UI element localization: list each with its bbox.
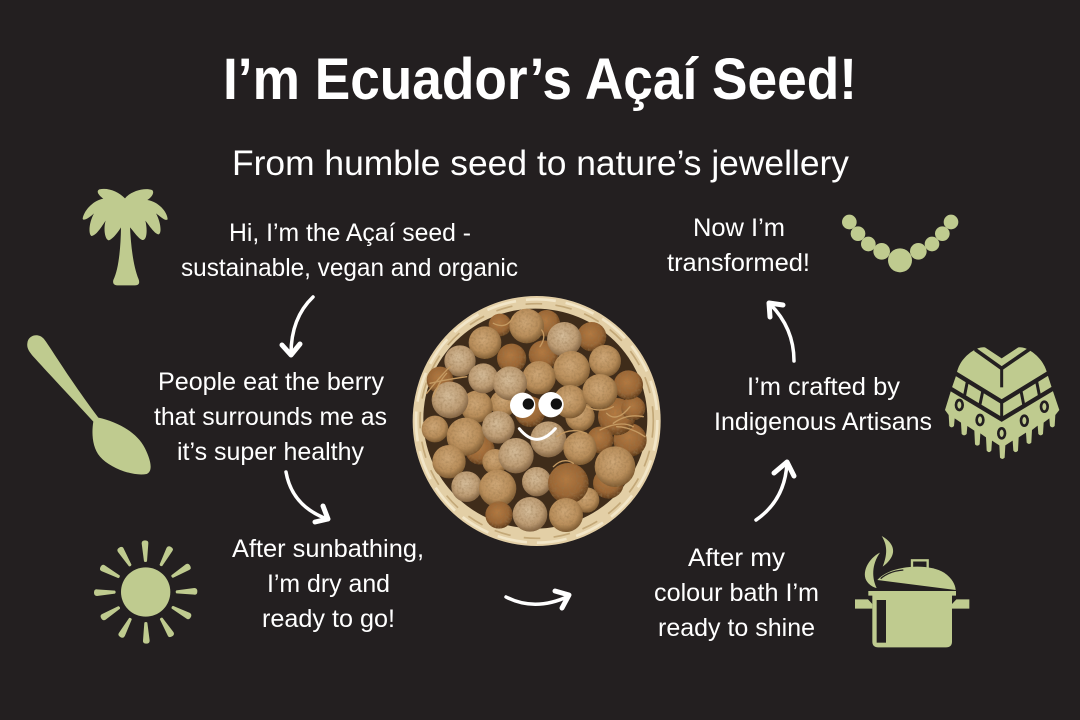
- text: people eat the berry: that surrounds me as: [154, 403, 387, 431]
- text: now transformed: transformed!: [667, 249, 810, 277]
- text: after sunbathing: ready to go!: [262, 605, 395, 633]
- text: after sunbathing: After sunbathing,: [232, 535, 424, 563]
- arrow: sunbathing to colour bath: [506, 591, 569, 608]
- seeds: [422, 309, 647, 532]
- icon: palm tree: [83, 189, 168, 285]
- right eye: [538, 392, 564, 417]
- text: crafted by artisans: [714, 373, 932, 436]
- text: colour bath: ready to shine: [658, 614, 815, 642]
- basket rim: [413, 296, 661, 546]
- text: introduction: [181, 219, 518, 282]
- seed fibres: [427, 317, 645, 467]
- text: crafted by artisans: I’m crafted by: [747, 373, 900, 401]
- text: introduction: sustainable, vegan and organic: [181, 254, 518, 282]
- text: crafted by artisans: Indigenous Artisans: [714, 408, 932, 436]
- left eye: [510, 393, 535, 418]
- icon: steaming pot: [855, 536, 969, 647]
- text: after sunbathing: I’m dry and: [267, 570, 390, 598]
- text: introduction: Hi, I’m the Açaí seed -: [229, 219, 471, 247]
- text: now transformed: Now I’m: [693, 214, 785, 242]
- subtitle: From humble seed to nature’s jewellery: [232, 144, 849, 183]
- text: now transformed: [667, 214, 810, 277]
- text: people eat the berry: [154, 368, 387, 466]
- basket of acai seeds: [413, 296, 661, 546]
- arrow: colour bath to crafted: [756, 462, 794, 520]
- text: colour bath: After my: [688, 544, 786, 572]
- icon: necklace: [842, 215, 958, 272]
- icon: sun: [94, 540, 197, 644]
- title: I’m Ecuador’s Açaí Seed!: [223, 47, 857, 112]
- arrow: crafted to transformed: [769, 303, 794, 361]
- text: colour bath: [654, 544, 819, 642]
- face on seed: [510, 392, 564, 439]
- smile: [519, 429, 555, 439]
- text: after sunbathing: [232, 535, 424, 633]
- text: people eat the berry: People eat the berry: [158, 368, 384, 396]
- icon: spoon: [27, 335, 151, 474]
- arrow: intro to berry: [282, 297, 313, 355]
- text: people eat the berry: it’s super healthy: [177, 438, 364, 466]
- arrow: berry to sunbathing: [286, 472, 328, 522]
- icon: poncho: [945, 347, 1059, 459]
- text: colour bath: colour bath I’m: [654, 579, 819, 607]
